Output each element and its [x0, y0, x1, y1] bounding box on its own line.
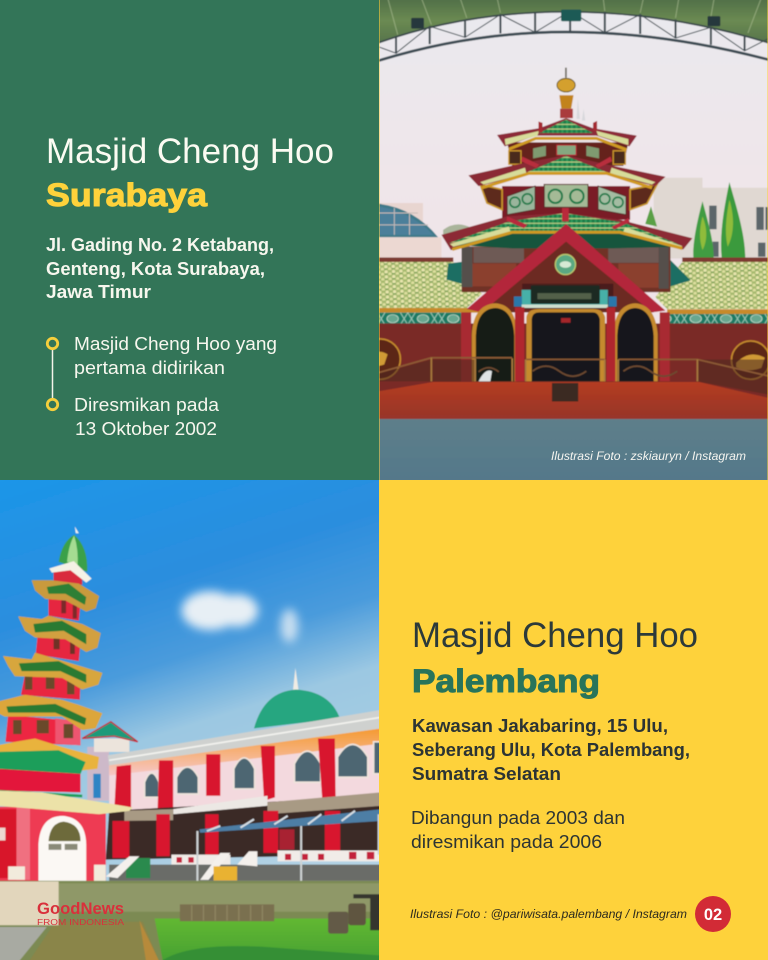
timeline dot 1 [47, 338, 58, 349]
page number badge: 02 [704, 906, 722, 924]
logo: GoodNews From Indonesia [37, 899, 124, 927]
tower tier 4 [0, 695, 102, 745]
panel: Palembang text [410, 616, 731, 932]
building lower floor [106, 792, 381, 860]
tower tier 1 [32, 580, 99, 621]
tower base and door [0, 791, 133, 887]
pagoda finial [557, 68, 585, 121]
panel: Surabaya text [0, 0, 379, 480]
tower dome [49, 526, 92, 585]
fact: built and inaugurated: diresmikan pada 2006 [411, 831, 602, 852]
building upper floor [108, 710, 379, 810]
tower tier 2 [18, 616, 101, 661]
timeline dot 2 [47, 399, 58, 410]
railing and floor [378, 358, 768, 420]
logo: GoodNews From Indonesia: GoodNews [37, 899, 124, 918]
fact: built and inaugurated: Dibangun pada 2003 dan [411, 807, 625, 828]
side roofs [378, 257, 768, 326]
address: Surabaya: Genteng, Kota Surabaya, [46, 258, 265, 279]
credit: Surabaya photo: Ilustrasi Foto : zskiauryn / Instagram [551, 449, 746, 463]
tower tier 5 [0, 738, 99, 797]
dome and spire [254, 668, 340, 728]
signboard [522, 290, 608, 306]
main hall wall [378, 247, 768, 404]
cloud [182, 591, 298, 643]
heading: Palembang: Palembang [412, 663, 600, 699]
small pavilion [82, 722, 138, 801]
fact: first built: Masjid Cheng Hoo yang [74, 333, 277, 354]
log seats and table [180, 894, 381, 934]
pagoda middle tier [468, 155, 665, 220]
address: Palembang: Sumatra Selatan [412, 763, 561, 784]
logo: GoodNews From Indonesia: FROM INDONESIA [37, 917, 124, 927]
address: Palembang [412, 715, 690, 784]
heading: Surabaya: Surabaya [46, 177, 207, 213]
tower tier 3 [3, 653, 102, 700]
fact: first built: pertama didirikan [74, 357, 225, 378]
fact: inauguration [74, 394, 220, 439]
photo: Masjid Cheng Hoo Surabaya [360, 0, 768, 482]
arches and columns [461, 303, 670, 381]
page number badge [695, 896, 731, 932]
address: Palembang: Kawasan Jakabaring, 15 Ulu, [412, 715, 668, 736]
heading: Masjid Cheng Hoo: Masjid Cheng Hoo [412, 616, 698, 655]
courtyard ground [378, 419, 768, 482]
cypress trees [645, 182, 745, 257]
minaret tower [0, 526, 102, 797]
fact: inauguration: Diresmikan pada [74, 394, 220, 415]
address: Surabaya: Jawa Timur [46, 281, 151, 302]
building plinth [106, 851, 381, 881]
credit: Palembang photo: Ilustrasi Foto : @pariwisata.palembang / Instagram [410, 907, 687, 921]
address: Surabaya [46, 234, 274, 302]
buildings behind [378, 178, 768, 258]
carport frame [197, 809, 381, 890]
entrance gable [467, 224, 665, 312]
calligraphy medallions [360, 339, 768, 379]
heading: Masjid Cheng Hoo: Masjid Cheng Hoo [46, 132, 334, 171]
lawn and path [0, 881, 381, 960]
canopy [378, 0, 768, 61]
address: Surabaya: Jl. Gading No. 2 Ketabang, [46, 234, 274, 255]
fact: first built [74, 333, 277, 378]
timeline connector [52, 349, 54, 399]
fact: inauguration: 13 Oktober 2002 [75, 418, 217, 439]
pagoda upper tier [497, 118, 637, 166]
address: Palembang: Seberang Ulu, Kota Palembang, [412, 739, 690, 760]
pagoda lower roof [441, 208, 692, 250]
photo: Masjid Cheng Hoo Palembang [0, 478, 381, 960]
fact: built and inaugurated [411, 807, 625, 852]
